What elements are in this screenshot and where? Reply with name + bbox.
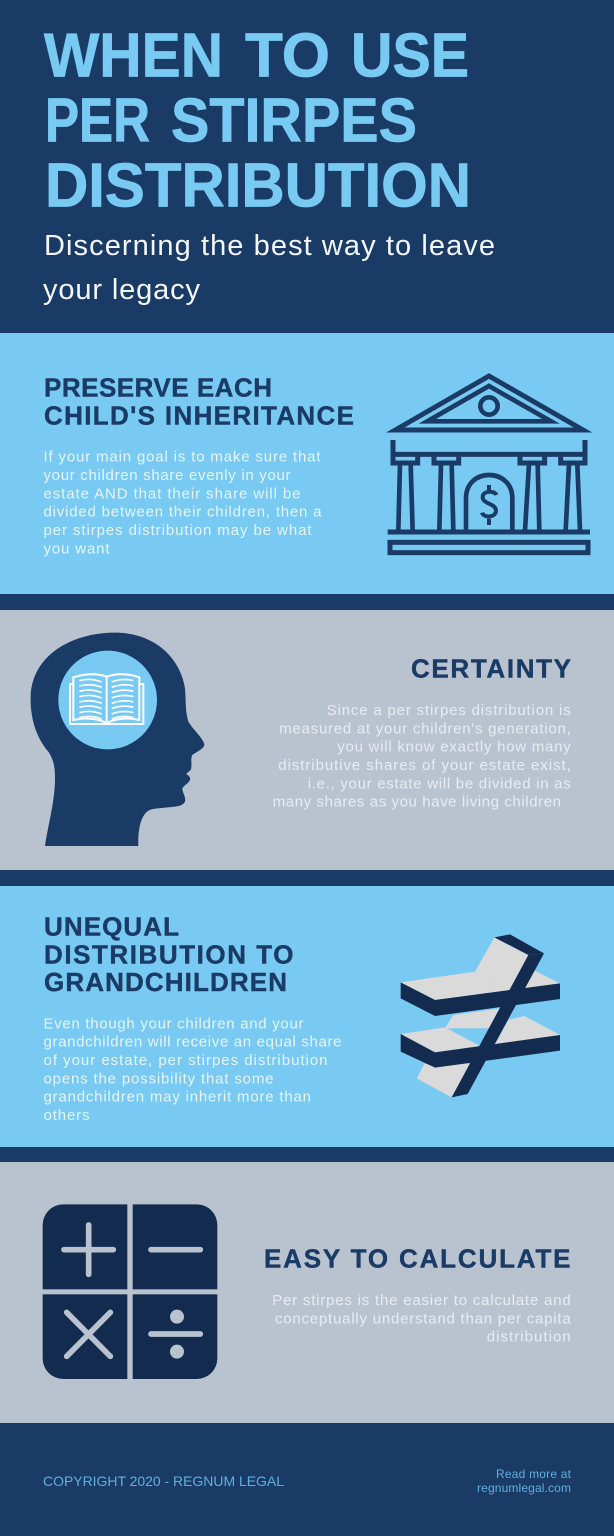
icon: calculator operators [40, 1202, 220, 1382]
text block: preserve: divided between their children, then a [44, 504, 322, 521]
panel: easy to calculate [0, 1162, 614, 1423]
text block: preserve: you want [44, 540, 110, 557]
icon: open book [70, 674, 143, 724]
subtitle: your legacy [43, 274, 200, 306]
text block: unequal: others [44, 1107, 90, 1124]
text block: certainty: many shares as you have living children [273, 794, 561, 811]
heading: easy to calculate: EASY TO CALCULATE [264, 1243, 570, 1273]
text block: preserve: your children share evenly in your [44, 467, 290, 484]
footer: read more link [477, 1467, 572, 1495]
text block: certainty [273, 702, 571, 811]
text block: certainty: you will know exactly how many [337, 739, 571, 756]
subtitle: Discerning the best way to leave [44, 230, 495, 262]
title: WHEN [44, 22, 223, 90]
text block: unequal: grandchildren will receive an equal share [44, 1034, 342, 1051]
text block: certainty: i.e., your estate will be divided in as [308, 775, 571, 792]
heading: unequal: UNEQUAL [44, 912, 179, 942]
text block: easy to calculate: conceptually understand than per capita [275, 1310, 571, 1327]
text block: preserve: per stirpes distribution may be what [44, 522, 312, 539]
text block: unequal [44, 1015, 342, 1124]
heading: unequal: GRANDCHILDREN [44, 967, 287, 997]
title: USE [351, 22, 469, 90]
text block: preserve: If your main goal is to make sure that [44, 449, 321, 466]
title [44, 22, 471, 220]
text block: preserve: estate AND that their share will be [44, 485, 300, 502]
text block: certainty: measured at your children's generation, [279, 720, 571, 737]
icon: bank building [388, 376, 590, 553]
text block: preserve [44, 449, 322, 557]
text block: easy to calculate: distribution [487, 1329, 571, 1346]
heading: certainty: CERTAINTY [411, 654, 571, 684]
text block: unequal: of your estate, per stirpes distribution [44, 1052, 328, 1069]
title: STIRPES [171, 86, 417, 156]
text block: easy to calculate [272, 1292, 571, 1346]
panel: certainty [0, 610, 614, 870]
panel: unequal distribution to grandchildren [0, 886, 614, 1147]
heading: preserve: PRESERVE EACH [44, 373, 272, 403]
text block: unequal: Even though your children and your [44, 1015, 304, 1032]
text block: unequal: grandchildren may inherit more than [44, 1089, 311, 1106]
text block: certainty: Since a per stirpes distribution is [327, 702, 571, 719]
icon: head with book [31, 633, 204, 846]
title: TO [245, 22, 330, 90]
footer: copyright: COPYRIGHT 2020 - REGNUM LEGAL [43, 1473, 284, 1489]
heading: preserve [44, 373, 354, 430]
title: PER [45, 86, 150, 156]
text block: unequal: opens the possibility that some [44, 1070, 274, 1087]
heading: unequal [44, 912, 294, 997]
text block: easy to calculate: Per stirpes is the easier to calculate and [272, 1292, 571, 1309]
subtitle [43, 230, 495, 306]
footer: read more link: Read more at [496, 1467, 572, 1481]
heading: unequal: DISTRIBUTION TO [44, 939, 294, 969]
heading: preserve: CHILD'S INHERITANCE [44, 400, 354, 430]
title: DISTRIBUTION [45, 152, 471, 220]
text block: certainty: distributive shares of your estate exist, [278, 757, 571, 774]
panel: preserve each child's inheritance [0, 333, 614, 594]
footer: read more link: regnumlegal.com [477, 1481, 571, 1495]
icon: not equal sign [401, 934, 560, 1097]
